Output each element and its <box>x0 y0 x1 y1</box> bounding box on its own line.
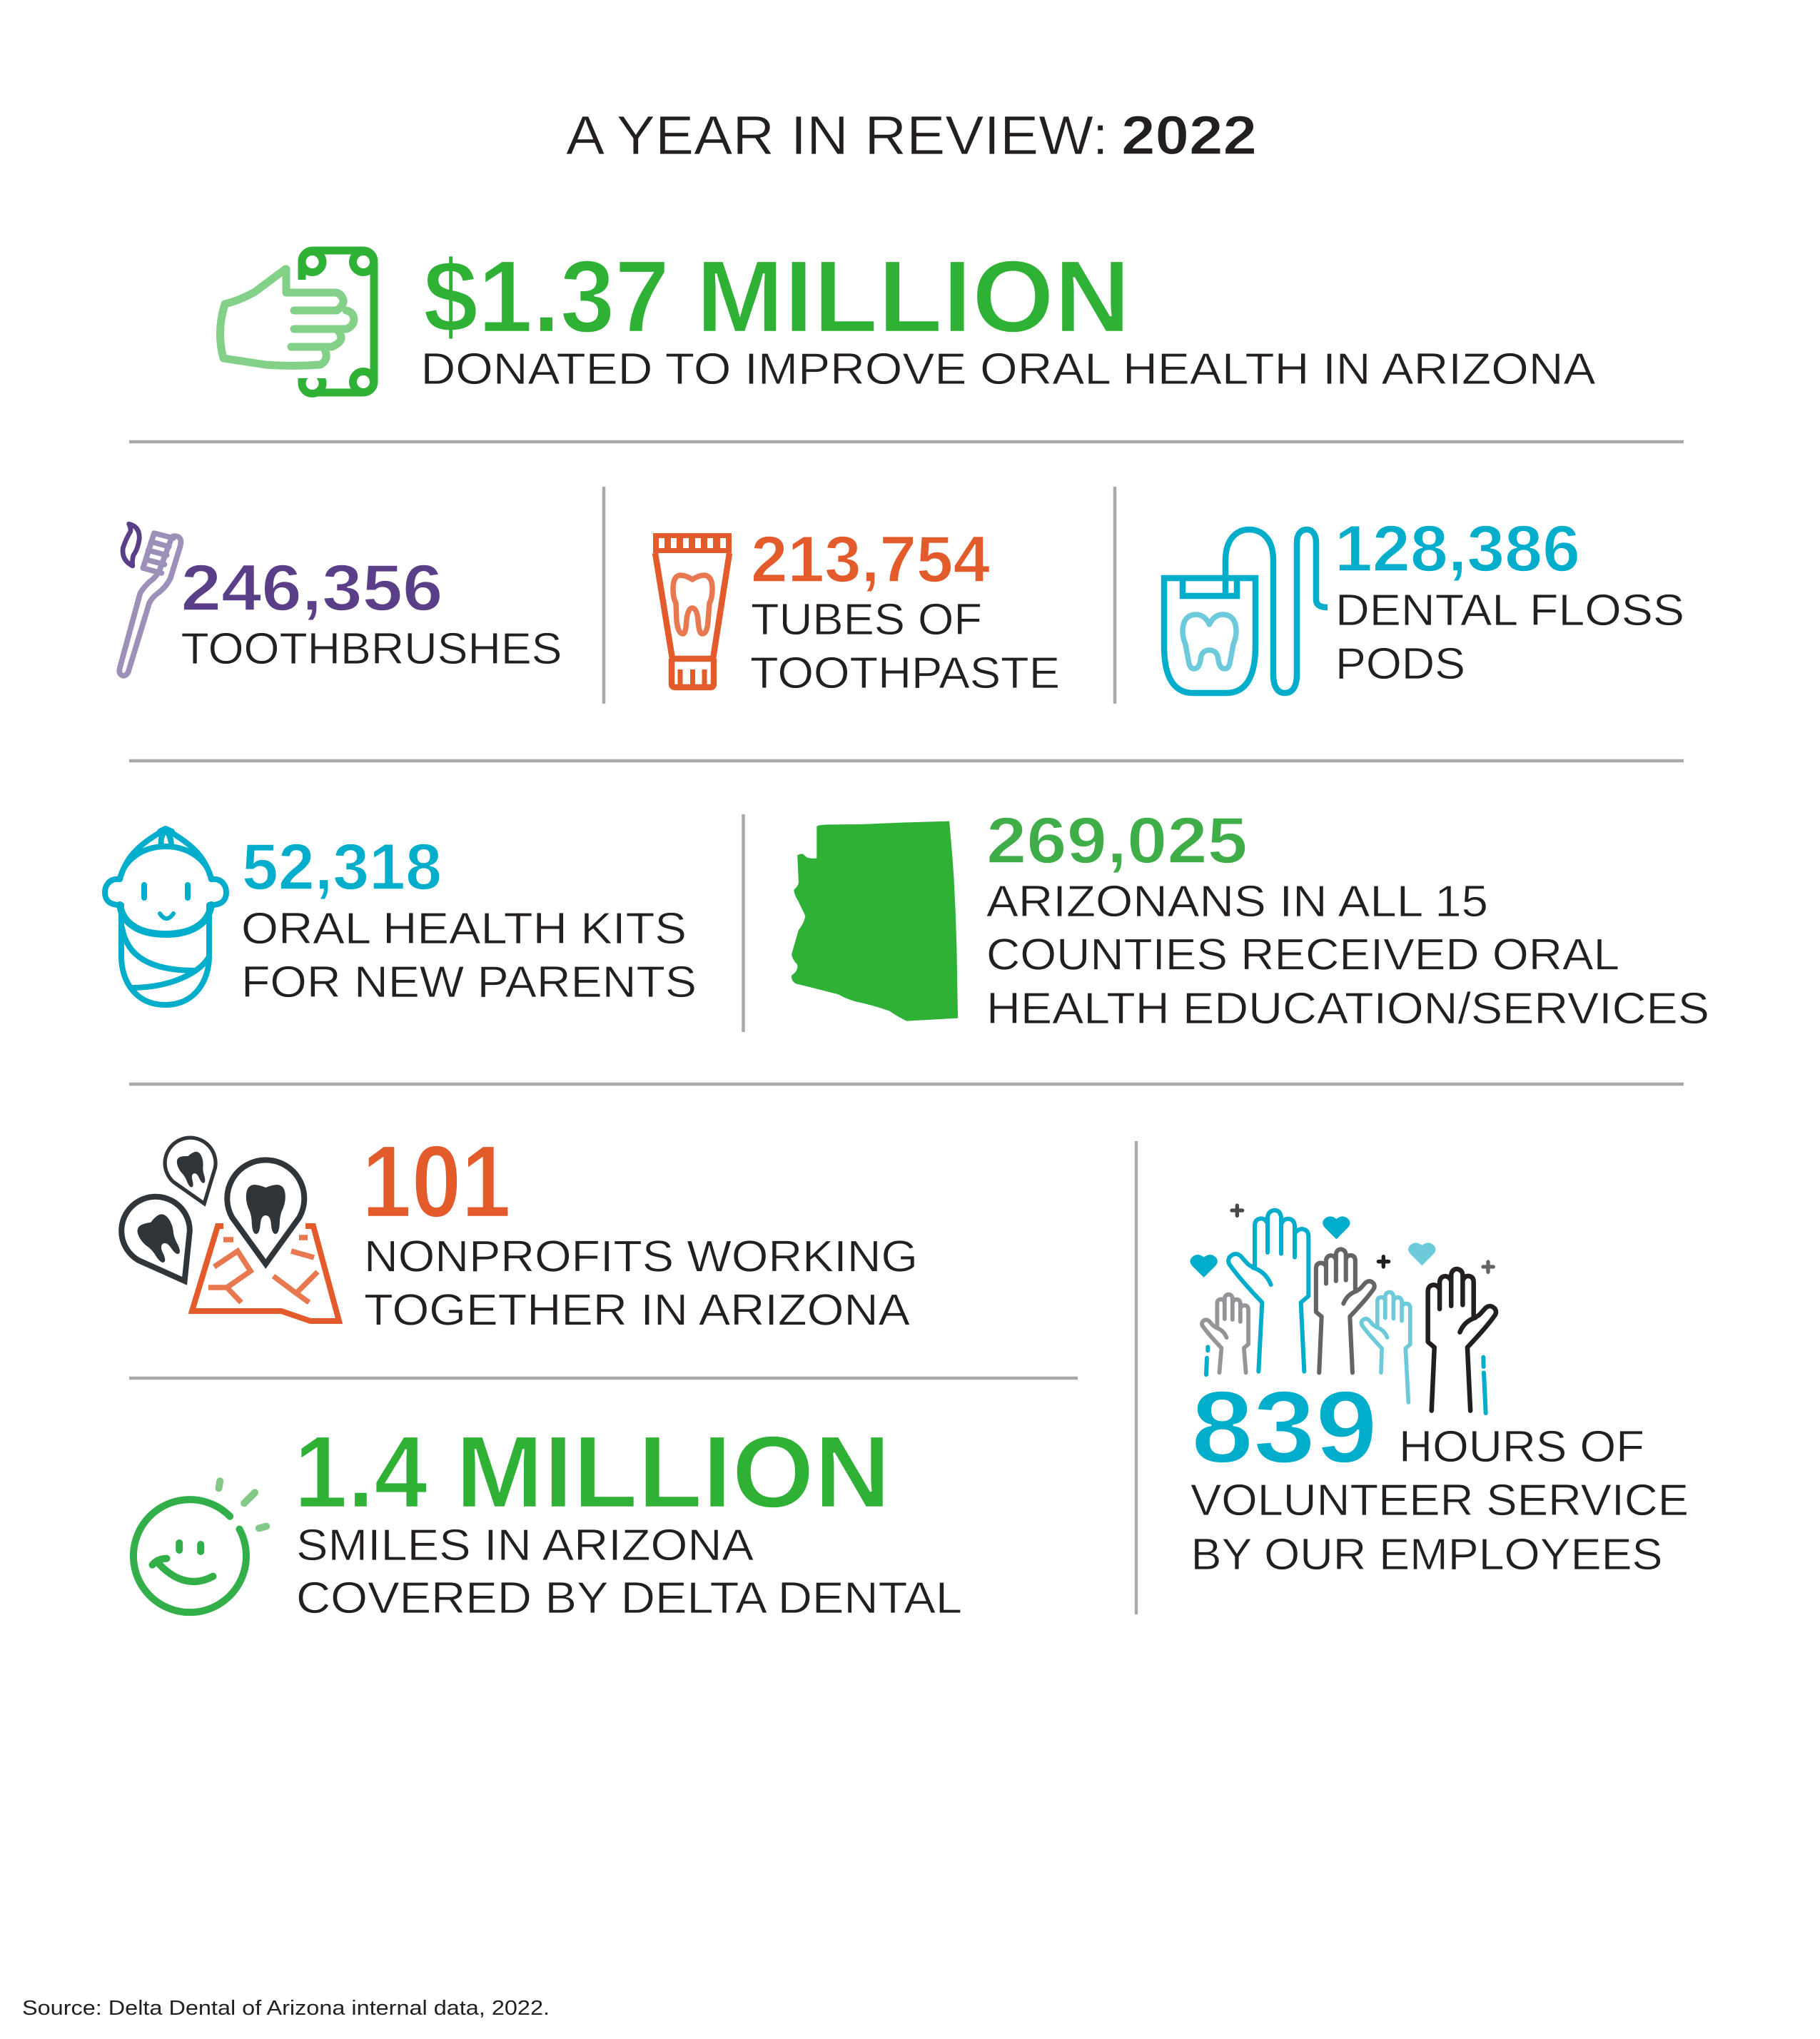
label <box>296 1521 962 1623</box>
label: DENTAL FLOSS <box>1335 586 1684 635</box>
label: HEALTH EDUCATION/SERVICES <box>986 984 1709 1033</box>
figure: 1.4 <box>294 1415 428 1529</box>
label: PODS <box>1335 639 1465 689</box>
label <box>1335 586 1684 689</box>
figure: 246,356 <box>181 552 443 624</box>
icon: toothpaste tube <box>653 533 732 687</box>
figure: 213,754 <box>751 523 990 596</box>
figure: 269,025 <box>986 804 1248 877</box>
headline figure: $1.37 <box>423 239 669 354</box>
label: COUNTIES RECEIVED ORAL <box>986 931 1619 979</box>
description: DONATED TO IMPROVE ORAL HEALTH IN ARIZONA <box>421 345 1596 394</box>
headline figure <box>423 239 1131 354</box>
title: 2022 <box>1121 105 1257 166</box>
title: A YEAR IN REVIEW: <box>566 105 1108 166</box>
label: FOR NEW PARENTS <box>241 958 697 1007</box>
label: SMILES IN ARIZONA <box>296 1521 754 1570</box>
panel: dental floss <box>1164 512 1684 693</box>
icon: floss pod <box>1164 530 1328 693</box>
label: ARIZONANS IN ALL 15 <box>986 877 1488 926</box>
label <box>241 904 697 1007</box>
label: TOOTHBRUSHES <box>181 624 562 674</box>
figure: 839 <box>1191 1370 1377 1484</box>
panel: toothpaste <box>653 523 1060 698</box>
figure: 101 <box>362 1124 511 1239</box>
label: TOOTHPASTE <box>750 649 1060 698</box>
icon: map of Arizona <box>792 821 958 1021</box>
icon: toothbrush <box>119 524 181 676</box>
panel: nonprofits <box>109 1124 918 1335</box>
panel: toothbrushes <box>119 524 562 676</box>
icon: raised hands <box>1190 1205 1496 1413</box>
panel: new parents <box>105 829 697 1007</box>
panel: volunteer hours <box>1190 1205 1689 1579</box>
label: NONPROFITS WORKING <box>364 1232 918 1282</box>
label: ORAL HEALTH KITS <box>241 904 687 953</box>
label <box>1190 1422 1689 1579</box>
panel: Arizonans served <box>792 804 1709 1033</box>
label: TOGETHER IN ARIZONA <box>364 1286 911 1335</box>
headline figure: MILLION <box>696 239 1131 354</box>
icon: smiling face <box>133 1481 266 1612</box>
source note: Source: Delta Dental of Arizona internal data, 2022. <box>22 1997 550 2020</box>
label <box>986 877 1709 1033</box>
icon: hand holding money <box>220 251 374 394</box>
figure: 52,318 <box>242 831 442 904</box>
panel: smiles covered <box>133 1415 962 1623</box>
label <box>364 1232 918 1335</box>
icon: map with tooth pins <box>109 1131 339 1321</box>
label: BY OUR EMPLOYEES <box>1190 1530 1663 1579</box>
icon: swaddled baby <box>105 829 226 1005</box>
panel: donation total <box>220 239 1596 394</box>
label: COVERED BY DELTA DENTAL <box>296 1574 962 1623</box>
label: HOURS OF <box>1399 1422 1644 1472</box>
label: VOLUNTEER SERVICE <box>1190 1476 1689 1525</box>
label <box>750 595 1060 698</box>
figure: 128,386 <box>1335 512 1580 585</box>
label: TUBES OF <box>751 595 982 644</box>
figure: MILLION <box>455 1415 891 1529</box>
